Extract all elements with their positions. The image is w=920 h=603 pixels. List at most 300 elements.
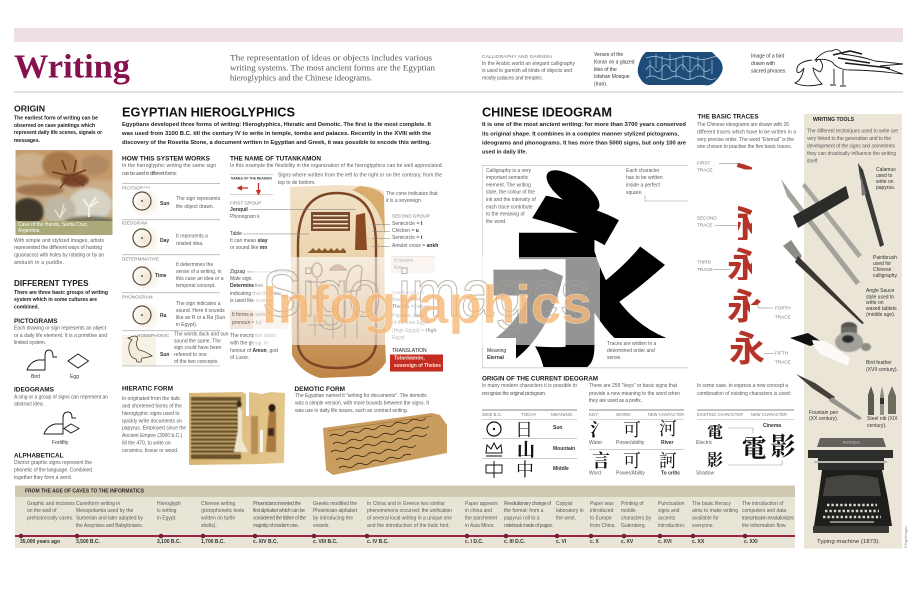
text: hieratic	[122, 396, 186, 454]
label: calamus: papyrus.	[876, 185, 895, 191]
text: demotic: was use in daily life issues, such as contract writing.	[295, 408, 408, 414]
text: writing tools: very linked to the generation and to the	[807, 136, 891, 142]
text: types intro: There are three basic groups of writing	[14, 290, 108, 296]
text: chinese intro	[482, 122, 687, 156]
table: pictogram evolution: Middle	[553, 466, 569, 472]
reading direction key: NAMES OF THE READING	[231, 176, 272, 180]
text: ideograms: A sing or a group of signs can represent an	[14, 394, 108, 400]
trace: first: 永	[726, 152, 764, 206]
intro text	[230, 52, 436, 82]
label: fifth trace: TRACE	[775, 360, 791, 364]
table: keys: 可	[623, 447, 641, 473]
label: table	[230, 231, 309, 251]
label: third trace: THIRD	[697, 260, 712, 264]
label: fountain pen	[809, 410, 838, 422]
label: table: It can mean stay	[230, 238, 268, 244]
row: phonogram: like an R or a Ra (Sun	[176, 315, 225, 321]
event: c. XV	[621, 501, 652, 545]
text: origin intro	[14, 116, 102, 144]
table: keys: WORD	[616, 412, 631, 417]
heading: the basic traces: THE BASIC TRACES	[698, 114, 759, 120]
text: origin description	[14, 238, 104, 266]
event: c. XX: c. XX	[692, 539, 705, 545]
panel: how this system works	[122, 156, 229, 366]
text: origin description: With simple and stylized images, artists	[14, 238, 104, 244]
label: angle sauce style: (middle age).	[866, 312, 895, 318]
tile caption: Koran on a glazed	[594, 60, 635, 66]
panel: writing tools	[781, 114, 902, 548]
row: ideogram: IDEOGRAM	[122, 220, 147, 226]
panel: egyptian hieroglyphics	[121, 104, 431, 146]
event: c. X: c. X	[590, 539, 600, 545]
table: pictogram evolution: Sun	[553, 425, 562, 431]
panel: origin	[10, 104, 116, 266]
row: homophonic: The words duck and sun	[174, 332, 229, 338]
row: ideogram: It represents a	[176, 234, 208, 240]
label: inscription	[230, 333, 278, 361]
heading: how this system works: HOW THIS SYSTEM WORKS	[122, 156, 211, 162]
text: tutankamon intro: In this example the flexibility in the organization of the hieroglyphics can be well appreciated.	[230, 163, 443, 169]
text: hieratic: hieroglyphic signs used to	[122, 411, 180, 417]
event: 1,700 bc: written on turtle	[201, 516, 235, 522]
text: column one: recognize the original pictogram.	[482, 391, 546, 397]
row: phonogram: The sign indicates a	[176, 301, 221, 307]
label: third trace	[697, 260, 730, 272]
event: c. XX: available for	[692, 516, 719, 522]
label: calamus	[876, 167, 896, 191]
event: c. VI: Copyist	[556, 501, 573, 507]
table: combined characters: Shadow	[696, 470, 714, 476]
text: hieratic: and shortened forms of the	[122, 404, 182, 410]
heading: pictograms: PICTOGRAMS	[14, 318, 58, 325]
trace: third: 永	[727, 237, 763, 289]
text: writing tools: development of the signs and sometimes	[807, 144, 896, 150]
event: 3,100 bc: in Egypt.	[157, 516, 176, 522]
label: bird: Bird	[31, 374, 40, 380]
event: 1,700 bc	[201, 501, 245, 545]
event: c. XX: aims to make writing	[692, 508, 738, 514]
text: demotic	[295, 393, 430, 414]
event: c. I dc	[465, 501, 498, 545]
label: table: Table	[230, 231, 242, 237]
table: keys: KEY	[589, 412, 598, 417]
event: c. XVI: c. XVI	[658, 539, 672, 545]
text: origin description: ambush in a puddle.	[14, 260, 64, 266]
text: egyptian intro: Egyptians developed three forms of writing: Hieroglyphics, Hieratic and Demotic. The first is the most complete. It	[122, 122, 431, 128]
label: bird feather	[866, 360, 898, 373]
event: 3,100 bc: 3,100 B.C.	[157, 539, 182, 545]
panel: demotic form	[294, 386, 447, 475]
text: ideograms: abstract idea.	[14, 402, 44, 408]
event: c. XVI: introduction.	[658, 523, 685, 529]
label: third group: Egypt	[392, 335, 405, 341]
note: live box: live	[394, 265, 402, 271]
text: origin description: represented the different ways of hunting	[14, 245, 102, 251]
label: zigzag	[230, 269, 297, 304]
event: c. III dc: papyrus roll to a	[504, 516, 540, 522]
table: keys: 河	[659, 415, 677, 441]
text: chinese intro: used in daily life.	[482, 150, 527, 156]
bird caption: Image of a bird	[751, 54, 785, 60]
text: writing tools: they can drastically influence the writing	[807, 151, 896, 157]
event: c. III dc: Revolutionary change of	[504, 501, 552, 507]
text: egyptian intro: discovery of the Rosetta Stone, a document written in Egyptian and Greek, it was possible to encode this writing.	[122, 140, 431, 146]
event: c. IV bc: In China and in Greece two similar	[367, 501, 445, 507]
text: calligraphy note: Calligraphy is a very	[486, 168, 532, 174]
label: first group: Phonogram k	[230, 214, 260, 220]
table: combined characters: Electric	[696, 440, 713, 446]
intro text: writing systems. The most ancient forms are the Egyptian	[230, 62, 436, 72]
event: c. VI: the west.	[556, 516, 576, 522]
label: fourth trace: FORTH	[775, 306, 791, 310]
text: basic traces: one chosen to practise the five basic traces.	[697, 144, 792, 150]
timeline axis	[15, 535, 795, 537]
text: calligraphy note: important semantic	[486, 175, 529, 181]
text: order note: Traces are written in a	[607, 341, 656, 347]
text: alphabetical: together they form a word.	[14, 475, 72, 481]
event: c. III dc: the format: from a	[504, 508, 544, 514]
table: keys	[589, 410, 685, 488]
tool: calamus	[858, 163, 884, 247]
event: c. XV: characters by	[621, 516, 652, 522]
label: second group: Chicken = u	[392, 228, 419, 234]
event: c. IV bc: and the introduction of the italic font.	[367, 523, 450, 529]
text: demotic: was a simple version, with more bounds between the signs. It	[295, 400, 430, 406]
event: 3,100 bc: ic writing	[157, 508, 177, 514]
heading: egyptian hieroglyphics: EGYPTIAN HIEROGLYPHICS	[122, 104, 295, 120]
text: order note: sense.	[607, 355, 622, 361]
label: zigzag: Male sign.	[230, 276, 253, 282]
text: hieratic: Ancient Empire (3000 b.C.)	[122, 433, 183, 439]
event: 1,700 bc: shells).	[201, 523, 217, 529]
image: bird drawn with sacred phrases	[795, 50, 903, 86]
event: c. VIII bc: Greeks modified the	[313, 501, 357, 507]
icon: bird pictogram	[27, 350, 57, 370]
text: column two: There are 259 "keys" or basic signs that	[589, 383, 678, 389]
text: types intro	[14, 290, 108, 310]
label: second trace	[697, 216, 739, 228]
table: keys: 氵	[590, 416, 608, 442]
text: origin intro: observed on cave paintings which	[14, 123, 95, 129]
table: pictogram evolution: TODAY	[521, 412, 536, 417]
panel: the basic traces	[697, 114, 796, 372]
tool: stylus	[783, 240, 864, 324]
tool: feather	[790, 333, 850, 366]
text: signs direction: Signs where written from the left to the right or on the contrary, from the	[278, 172, 442, 178]
text: calligraphy note	[486, 168, 536, 225]
event: 35,000 years ago	[19, 501, 75, 545]
row: ideogram: related idea.	[176, 241, 204, 247]
calligraphy and garnish text: In the Arabic world an elegant calligraphy	[482, 61, 576, 67]
label: bird feather: (XVII century).	[866, 367, 898, 373]
label: first group: Jonquil	[230, 207, 248, 213]
event: c. XIV bc: majority of modern one.	[253, 523, 299, 529]
text: system intro: can be used in different forms:	[122, 171, 177, 177]
reading direction key	[230, 174, 273, 195]
heading: different types: DIFFERENT TYPES	[14, 278, 89, 288]
label: cone: The cone indicates that	[386, 191, 438, 197]
tile caption	[594, 52, 635, 88]
label: second group: Amulet cross = ankh	[392, 243, 438, 249]
table: pictogram evolution: 日	[515, 416, 533, 442]
event: 35,000 years ago: prehistorically caves.	[27, 516, 73, 522]
label: angle sauce style	[866, 288, 897, 318]
top divider	[14, 92, 903, 93]
event: c. III dc	[504, 501, 553, 545]
row: determinative: temporal concept.	[176, 283, 216, 289]
text: egyptian intro	[121, 122, 431, 146]
text: order note	[607, 341, 656, 361]
row: pictogram: The sign represents	[176, 196, 221, 202]
label: third group: THIRD GROUP	[392, 290, 424, 296]
event: c. VI: laboratory in	[556, 508, 584, 514]
text: column three	[697, 383, 791, 397]
title: Writing	[14, 48, 130, 86]
calligraphy and garnish text: is used to garnish all kinds of objects and	[482, 68, 572, 74]
event: c. XV: c. XV	[621, 539, 634, 545]
event: 3,100 bc	[157, 501, 182, 545]
table: keys: 訶	[659, 447, 677, 473]
event: c. XX: everyone.	[692, 523, 714, 529]
row: phonogram: in Egypt).	[176, 322, 197, 328]
row: homophonic	[122, 330, 229, 366]
row: phonogram: PHONOGRAM	[122, 294, 153, 300]
tile caption: (Iran).	[594, 82, 607, 88]
panel: timeline	[15, 486, 795, 548]
row: homophonic: HOMOPHONIC	[137, 333, 170, 338]
row: homophonic: sound the same. The	[174, 338, 221, 344]
text: signs direction: top to de bottom.	[278, 180, 316, 186]
event: 3,500 bc: 3,500 B.C.	[76, 539, 101, 545]
icon: egg pictogram	[68, 354, 88, 368]
event: c. XV: Gutenberg.	[621, 523, 646, 529]
label: paintbrush: used for	[873, 261, 891, 267]
label: third group: Papyrus, plant	[392, 313, 425, 319]
text: alphabetical: District graphic signs represent the	[14, 460, 92, 466]
label: fountain pen: Fountain pen	[809, 410, 838, 416]
image: papyrus	[189, 392, 285, 465]
icon: fortifity ideogram	[44, 412, 79, 434]
label: zigzag: Zigzag	[230, 269, 245, 275]
event: c. X	[589, 501, 616, 545]
text: basic traces: The Chinese ideograms are drawn with 26	[697, 122, 789, 128]
label: inscription: honour of Amon, god	[230, 348, 278, 354]
event: c. VIII bc: Phoenician alphabet	[313, 508, 358, 514]
heading: origin of current ideogram: ORIGIN OF THE CURRENT IDEOGRAM	[482, 376, 598, 382]
label: first group: FIRST GROUP	[230, 200, 261, 206]
text: hieratic: In originated from the italic	[122, 396, 181, 402]
text: calligraphy note: ink and the intensity of	[486, 197, 536, 203]
callout: translation: Tutankamón,	[394, 356, 425, 362]
event: c. I dc: Paper appears	[465, 501, 498, 507]
square frame	[482, 165, 688, 368]
label: fifth trace: FIFTH	[775, 350, 788, 356]
text: pictograms: Each drawing or sign represents an object	[14, 326, 107, 332]
event: c. XX: The basic literacy	[692, 501, 731, 507]
label: paintbrush: Paintbrush	[873, 255, 897, 261]
intro text: The representation of ideas or objects includes various	[230, 52, 433, 62]
text: column one	[482, 383, 577, 397]
label: calamus: write on	[876, 179, 894, 185]
table: combined characters: EXISTING CHARACTER	[697, 412, 744, 417]
label: steel nib	[867, 416, 898, 429]
label: meaning	[487, 348, 506, 361]
trace: fourth: 永	[727, 278, 763, 330]
text: writing tools: itself.	[807, 158, 819, 164]
label: first trace	[697, 160, 740, 172]
label: zigzag: indicating that the table	[230, 291, 282, 297]
label: bird feather: Bird feather	[866, 360, 892, 366]
label: typing machine: Typing machine (1873).	[817, 539, 880, 545]
row: homophonic: referred to one	[174, 352, 207, 358]
table: pictogram evolution: 山	[517, 436, 535, 462]
header band	[14, 28, 903, 42]
calligraphy and garnish text: CALLIGRAPHY AND GARNISH	[482, 54, 552, 59]
label: steel nib: Steel nib (XIX	[867, 416, 898, 422]
text: basic traces: different traces which have to be written in a	[697, 130, 796, 136]
row: homophonic: Sun	[160, 352, 169, 358]
event: c. I dc: in china and	[465, 508, 492, 514]
caption band: Argentina	[18, 228, 40, 234]
callout: translation	[390, 348, 443, 372]
bird caption: drawn with	[751, 61, 775, 67]
heading: timeline: FROM THE AGE OF CAVES TO THE INFORMATICS	[25, 488, 145, 494]
panel: chinese ideogram	[482, 108, 688, 368]
event: c. X: introduced	[590, 508, 614, 514]
text: column three: In some case, to express a new concept a	[697, 383, 788, 389]
heading: origin: ORIGIN	[14, 104, 45, 114]
heading: demotic form: DEMOTIC FORM	[294, 386, 345, 393]
event: 1,700 bc: Chinese writing	[201, 501, 235, 507]
label: steel nib: century).	[867, 423, 886, 429]
panel: origin of the current ideogram	[482, 376, 796, 488]
row: homophonic: sign could have been	[174, 345, 221, 351]
text: calligraphy note: style, the colour of the	[486, 190, 535, 196]
calligraphy and garnish text: mostly palaces and temples.	[482, 76, 543, 82]
table: keys: Word	[589, 470, 601, 476]
table: pictogram evolution	[482, 410, 577, 488]
credit: ©Sigo/Images	[904, 526, 908, 548]
row: pictogram: the object drawn.	[176, 204, 214, 210]
label: calamus: used to	[876, 173, 893, 179]
table: combined characters	[696, 410, 796, 488]
calligraphy panel	[482, 165, 688, 368]
row: pictogram: PICTOGRAM	[122, 186, 150, 190]
text: hieratic: till the 470, to write on	[122, 440, 171, 446]
text: square note: inside a perfect	[626, 182, 661, 188]
image: glazed tile	[638, 52, 723, 85]
row: ideogram: Day	[160, 238, 169, 244]
note: pronoun box	[230, 310, 288, 329]
label: zigzag: Determinative	[230, 283, 263, 289]
row: homophonic: of the two concepts.	[174, 359, 218, 365]
image: wood tablet	[323, 413, 447, 475]
image: cave of the hands	[10, 150, 116, 235]
label: third trace: TRACE	[697, 267, 713, 272]
table: pictogram evolution: 中	[516, 456, 534, 482]
event: c. XVI: Punctuation	[658, 501, 685, 507]
table: combined characters: 影	[770, 427, 796, 463]
table: keys: 言	[592, 447, 610, 473]
event: c. XXI: transmission revolutionizes	[742, 516, 794, 522]
row: determinative: this case an idea or a	[176, 276, 224, 282]
text: square note	[626, 168, 663, 196]
callout: translation: TRANSLATION	[392, 348, 427, 354]
text: alphabetical: phonetic of the language. Combined	[14, 468, 92, 474]
label: first trace: TRACE	[697, 168, 713, 172]
text: hieratic: ceramics, tissue or wood.	[122, 448, 178, 454]
bird caption	[751, 54, 787, 74]
label: second group: SECOND GROUP	[392, 214, 430, 218]
label: paintbrush: Chinese	[873, 267, 892, 273]
event: 35,000 years ago: 35,000 years ago	[20, 539, 60, 545]
label: third group: (High Egypt) = High	[392, 328, 437, 334]
row: determinative: sense of a writing, in	[176, 269, 222, 275]
text: order note: determined order and	[607, 348, 655, 354]
label: first group	[230, 200, 356, 220]
panel: different types	[14, 278, 108, 481]
table: pictogram evolution: 3000 B.C.	[482, 412, 502, 417]
row: determinative: Time	[155, 273, 167, 279]
event: c. VI: c. VI	[556, 539, 567, 545]
label: fortifity: Fortifity	[52, 440, 69, 446]
row: ideogram	[122, 220, 220, 255]
text: types intro: combined.	[14, 304, 40, 310]
bird caption: sacred phrases.	[751, 68, 787, 74]
label: cone	[386, 191, 438, 204]
text: origin intro: messages.	[14, 138, 41, 144]
tool: steel nibs	[868, 386, 896, 415]
event: c. XIV bc: c. XIV B.C.	[253, 539, 279, 545]
text: pictograms: or a daily life element. It is a primitive and	[14, 333, 107, 339]
event: c. I dc: c. I D.C.	[465, 539, 484, 545]
text: writing tools	[807, 128, 898, 164]
text: calligraphy note: each trace contribute	[486, 204, 533, 210]
text: origin intro: The earliest form of writing can be	[14, 116, 98, 122]
watermark: infographics: Infographics	[262, 275, 592, 335]
table: keys: River	[661, 440, 674, 446]
table: pictogram evolution: MEANING	[551, 412, 573, 417]
event: c. XX	[691, 501, 738, 545]
row: phonogram	[122, 292, 225, 332]
text: hieratic: papyrus. Employed since the	[122, 426, 186, 432]
event: c. X: from China.	[590, 523, 616, 529]
callout: translation: sovereign of Thebes	[394, 363, 441, 369]
event: 3,100 bc: Hieroglyph	[157, 501, 181, 507]
event: c. XIV bc	[253, 501, 306, 545]
label: paintbrush: calligraphy.	[873, 273, 898, 279]
text: types intro: system which in some cultures are	[14, 297, 97, 303]
text: calligraphy note: to the meaning of	[486, 212, 525, 218]
event: c. XVI: accents	[658, 516, 676, 522]
row: pictogram: Sun	[160, 201, 169, 207]
text: chinese intro: its original shape. It combines in a complex manner stylized pictograms,	[482, 132, 679, 138]
event: c. XVI	[658, 501, 685, 545]
text: pictograms: limited system.	[14, 340, 46, 346]
label: table: or sound like mn	[230, 245, 267, 251]
text: column one: In many modern characters it is possible to	[482, 383, 577, 389]
text: writing tools: The different techniques used to write are	[807, 128, 898, 134]
heading: ideograms: IDEOGRAMS	[14, 386, 55, 394]
text: column two: they are used as a prefix.	[589, 398, 642, 404]
event: c. III dc: c. III D.C.	[504, 539, 526, 545]
heading: chinese ideogram: CHINESE IDEOGRAM	[482, 104, 612, 120]
label: third group: Thebes = hekaw	[392, 304, 430, 310]
text: origin intro: represent daily life scenes, signals or	[14, 130, 102, 136]
large character: eternal	[493, 170, 666, 367]
label: inscription: of Luxor.	[230, 355, 249, 361]
event: c. IV bc: c. IV B.C.	[367, 539, 389, 545]
